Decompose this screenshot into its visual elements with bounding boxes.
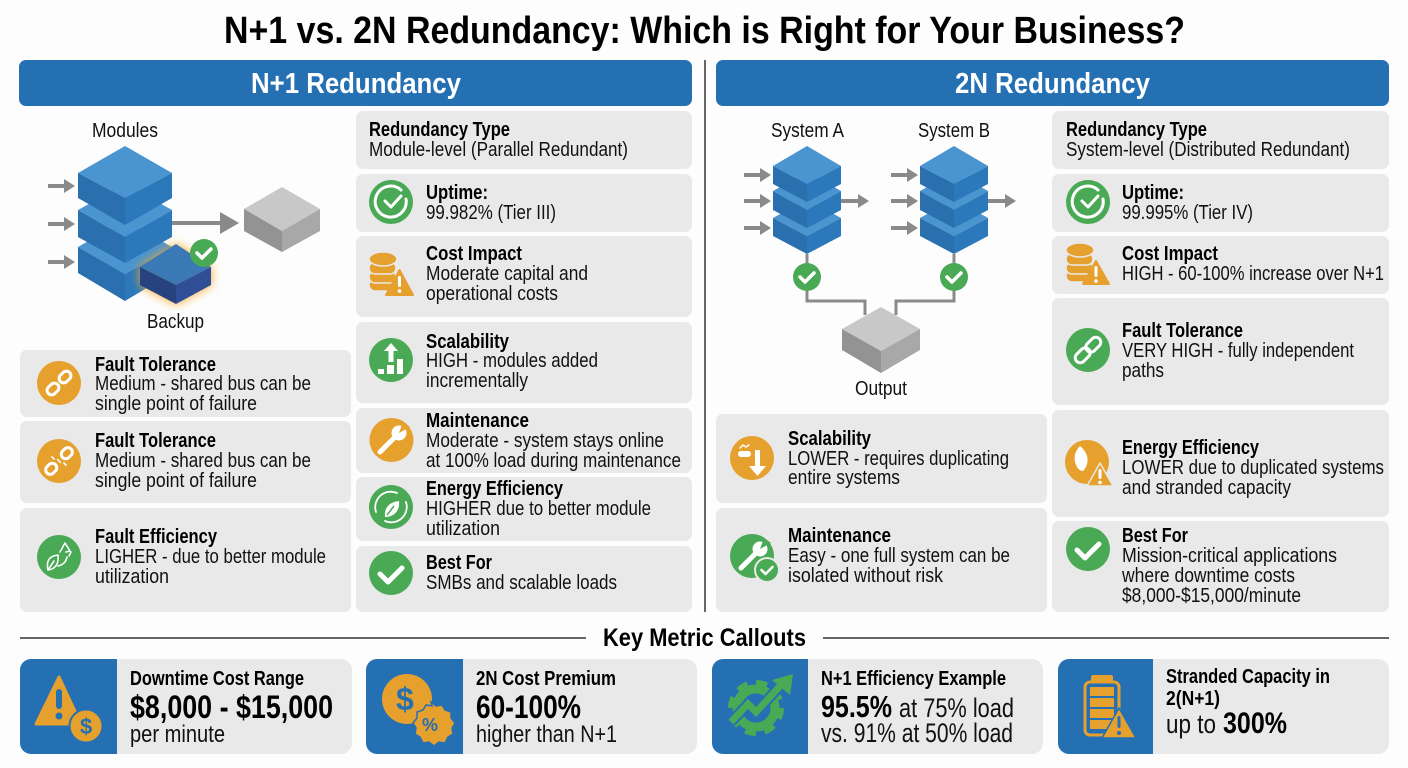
callout: downtime cost range: $8,000 - $15,000 [130,689,333,725]
panel: N+1 redundancy type: Module-level (Parallel Redundant) [369,139,628,161]
icon: coins with warning [369,252,413,295]
panel: 2N best for: Best For [1122,525,1188,547]
icon: battery with warning [1085,675,1136,738]
icon: wrench with check [730,534,779,582]
panel: N+1 redundancy type [356,111,692,169]
panel: N+1 maintenance: Maintenance [426,410,529,432]
panel: N+1 best for [356,546,692,612]
panel: N+1 redundancy type: Redundancy Type [369,119,510,141]
panel: N+1 maintenance: Moderate - system stays online [426,430,664,452]
panel: N+1 cost impact [356,236,692,317]
icon: leaf with warning [1065,440,1113,486]
icon: dollar coin with percent badge [382,674,455,746]
panel: 2N energy efficiency: Energy Efficiency [1122,437,1260,459]
icon: wrench [370,418,414,462]
callout: stranded capacity: Stranded Capacity in [1166,666,1330,688]
icon: recycle leaf [369,485,413,529]
icon: uptime check [1066,180,1110,224]
icon: check [369,551,413,595]
panel: N+1 best for: Best For [426,552,492,574]
callout: stranded capacity: 2(N+1) [1166,688,1220,710]
panel: N+1 maintenance [356,408,692,473]
callout: N+1 efficiency example: vs. 91% at 50% load [821,718,1013,748]
callout: N+1 efficiency example [712,659,1043,754]
panel: 2N best for: where downtime costs [1121,565,1295,587]
icon: scaling down [730,436,774,480]
icon: leaf efficiency [37,535,81,579]
icon: warning with dollar coin [36,677,102,742]
panel: N+1 scalability: incrementally [426,370,528,392]
callout: stranded capacity: 300% [1223,707,1287,740]
icon: uptime check [369,180,413,224]
panel: 2N maintenance: Maintenance [788,525,891,547]
panel: 2N redundancy type: System-level (Distributed Redundant) [1066,139,1350,161]
panel: N+1 energy efficiency: Energy Efficiency [426,478,564,500]
panel: N+1 fault efficiency: Fault Efficiency [95,526,218,548]
panel: 2N maintenance: Easy - one full system can be [788,545,1010,567]
diagram: N+1 modules and backup [48,120,320,333]
panel: N+1 scalability [356,322,692,403]
panel: 2N energy efficiency [1052,410,1389,517]
diagram: 2N dual systems: System A [771,120,845,142]
diagram: N+1 modules and backup: Modules [92,120,158,142]
icon: gear with rising arrow [731,674,793,733]
panel: 2N redundancy type: Redundancy Type [1066,119,1207,141]
panel: 2N fault tolerance: Fault Tolerance [1122,320,1243,342]
callout: downtime cost range [20,659,352,754]
diagram: 2N dual systems: Output [855,378,907,400]
panel: 2N scalability: entire systems [788,467,900,489]
heading: Key Metric Callouts: Key Metric Callouts [603,624,806,652]
heading: 2N Redundancy: 2N Redundancy [955,68,1150,100]
panel: 2N uptime: Uptime: [1122,182,1184,204]
panel: 2N fault tolerance: VERY HIGH - fully independent [1122,340,1354,362]
panel: N+1 fault efficiency: LIGHER - due to better module [95,546,326,568]
callout: N+1 efficiency example: 95.5% [821,689,892,724]
callout: N+1 efficiency example: at 75% load [899,693,1014,723]
panel: 2N uptime: 99.995% (Tier IV) [1122,202,1253,224]
callout: stranded capacity [1058,659,1389,754]
panel: N+1 uptime: 99.982% (Tier III) [426,202,556,224]
panel: N+1 fault tolerance (link): Fault Tolerance [95,354,216,376]
panel: N+1 fault tolerance (link) [20,350,351,417]
panel: N+1 fault tolerance (broken link): Fault Tolerance [95,430,216,452]
icon: chain link [37,361,81,405]
panel: N+1 energy efficiency [356,477,692,541]
panel: 2N best for [1052,521,1389,612]
callout: downtime cost range: Downtime Cost Range [130,668,304,690]
callout: 2N cost premium: 2N Cost Premium [476,668,616,690]
icon: dollar coin with percent badge: $ [396,681,414,717]
panel: N+1 scalability: HIGH - modules added [426,350,598,372]
panel: 2N scalability: Scalability [788,428,872,450]
panel: 2N maintenance [716,508,1047,612]
heading: N+1 Redundancy [19,60,692,106]
panel: 2N fault tolerance: paths [1122,360,1164,382]
panel: N+1 fault efficiency: utilization [95,566,169,588]
panel: 2N cost impact: Cost Impact [1122,243,1218,265]
diagram: 2N dual systems [744,120,1016,400]
panel: N+1 uptime: Uptime: [426,182,488,204]
panel: N+1 cost impact: Moderate capital and [426,263,588,285]
callout: downtime cost range: per minute [130,721,225,748]
panel: 2N redundancy type [1052,111,1389,169]
panel: 2N uptime [1052,174,1389,232]
callout: 2N cost premium: higher than N+1 [476,721,617,748]
panel: N+1 fault tolerance (broken link): Medium - shared bus can be [95,450,311,472]
panel: N+1 cost impact: Cost Impact [426,243,522,265]
panel: N+1 best for: SMBs and scalable loads [426,572,617,594]
callout: 2N cost premium [366,659,697,754]
heading: 2N Redundancy [716,60,1389,106]
panel: N+1 fault efficiency [20,508,351,612]
icon: warning with dollar coin: $ [80,714,92,739]
panel: N+1 fault tolerance (broken link): single point of failure [95,470,257,492]
title: N+1 vs. 2N Redundancy: Which is Right for Your Business? [224,10,1185,52]
panel: 2N cost impact [1052,236,1389,294]
icon: chain link [1066,328,1110,372]
panel: 2N scalability: LOWER - requires duplicating [788,448,1009,470]
panel: N+1 scalability: Scalability [426,331,510,353]
panel: N+1 uptime [356,174,692,232]
icon: scaling up [369,338,413,382]
panel: N+1 fault tolerance (broken link) [20,421,351,503]
panel: 2N best for: Mission-critical applications [1122,545,1337,567]
panel: 2N fault tolerance [1052,298,1389,405]
icon: check [1066,527,1110,571]
panel: N+1 fault tolerance (link): single point of failure [95,393,257,415]
panel: 2N energy efficiency: and stranded capacity [1122,477,1291,499]
panel: N+1 cost impact: operational costs [426,283,558,305]
heading: N+1 Redundancy: N+1 Redundancy [251,68,461,100]
callout: 2N cost premium: 60-100% [476,689,581,725]
panel: N+1 maintenance: at 100% load during maintenance [426,450,681,472]
diagram: N+1 modules and backup: Backup [147,311,204,333]
panel: 2N best for: $8,000-$15,000/minute [1122,585,1301,607]
callout: stranded capacity: up to [1166,709,1216,739]
panel: 2N maintenance: isolated without risk [788,565,944,587]
icon: broken chain link [37,439,81,483]
panel: N+1 energy efficiency: HIGHER due to better module [426,498,651,520]
callout: N+1 efficiency example: N+1 Efficiency Example [821,668,1006,690]
panel: N+1 energy efficiency: utilization [426,518,500,540]
icon: coins with warning [1066,243,1109,284]
panel: 2N scalability [716,414,1047,503]
icon: dollar coin with percent badge: % [422,715,438,735]
panel: N+1 fault tolerance (link): Medium - shared bus can be [95,373,311,395]
diagram: 2N dual systems: System B [918,120,990,142]
